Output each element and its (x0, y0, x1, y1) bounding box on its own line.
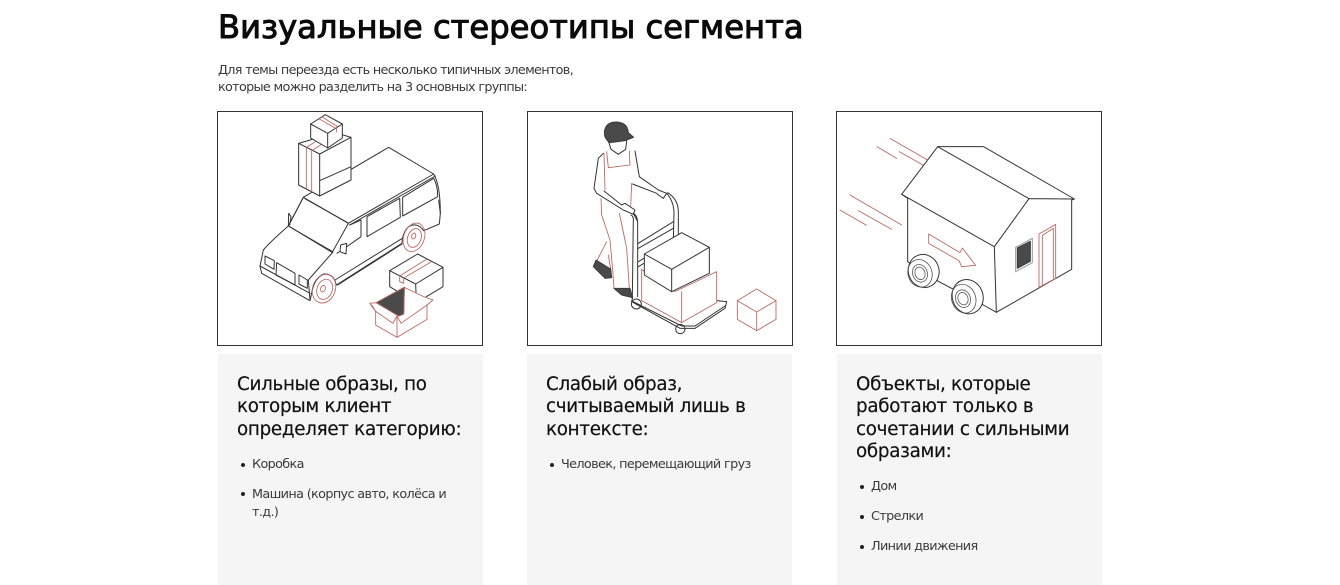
icon: closed box (390, 254, 443, 303)
intro text: которые можно разделить на 3 основных группы: (218, 80, 527, 95)
heading: определяет категорию: (237, 419, 461, 440)
panel: house illustration frame (836, 111, 1102, 346)
panel: card 1 (218, 354, 483, 585)
bullet list: Коробка (252, 457, 304, 472)
illustration: worker with cart (592, 122, 776, 334)
icon: stacked boxes on the roof (299, 115, 351, 196)
bullet list: Человек, перемещающий груз (561, 457, 751, 472)
title: Визуальные стереотипы сегмента (218, 8, 804, 46)
icon: house (902, 147, 1074, 312)
intro text (218, 63, 573, 95)
icon: van (260, 147, 440, 306)
bullet list (241, 457, 446, 520)
icon: boxes on cart (642, 233, 717, 323)
bullet list: Дом (871, 479, 897, 494)
panel: worker illustration frame (527, 111, 793, 346)
icon: cart (631, 193, 727, 334)
illustration: van and boxes (260, 114, 444, 338)
heading: работают только в (856, 396, 1033, 417)
bullet list: Стрелки (871, 509, 923, 524)
heading: образами: (856, 441, 952, 462)
heading (856, 374, 1069, 462)
icon: worker (593, 122, 667, 298)
heading: Объекты, которые (856, 374, 1030, 395)
icon: small box (737, 289, 776, 331)
panel: card 3 (837, 354, 1102, 585)
heading: которым клиент (237, 396, 391, 417)
icon: open box (370, 287, 433, 337)
heading: сочетании с сильными (856, 419, 1069, 440)
heading: Сильные образы, по (237, 374, 427, 395)
illustration: house on wheels (840, 138, 1075, 314)
bullet list: Линии движения (871, 539, 978, 554)
heading (546, 374, 746, 440)
panel: card 2 (527, 354, 792, 585)
icon: motion lines (840, 138, 939, 229)
bullet list: т.д.) (252, 505, 278, 520)
heading: контексте: (546, 419, 648, 440)
intro text: Для темы переезда есть несколько типичных элементов, (218, 63, 573, 78)
bullet list (860, 479, 978, 554)
heading: считываемый лишь в (546, 396, 746, 417)
bullet list: Машина (корпус авто, колёса и (252, 487, 446, 502)
icon: wheels (904, 250, 988, 318)
icon: arrow (929, 234, 976, 267)
icon: door (1039, 224, 1056, 287)
panel: van illustration frame (217, 111, 483, 346)
heading: Слабый образ, (546, 374, 682, 395)
heading (237, 374, 461, 440)
